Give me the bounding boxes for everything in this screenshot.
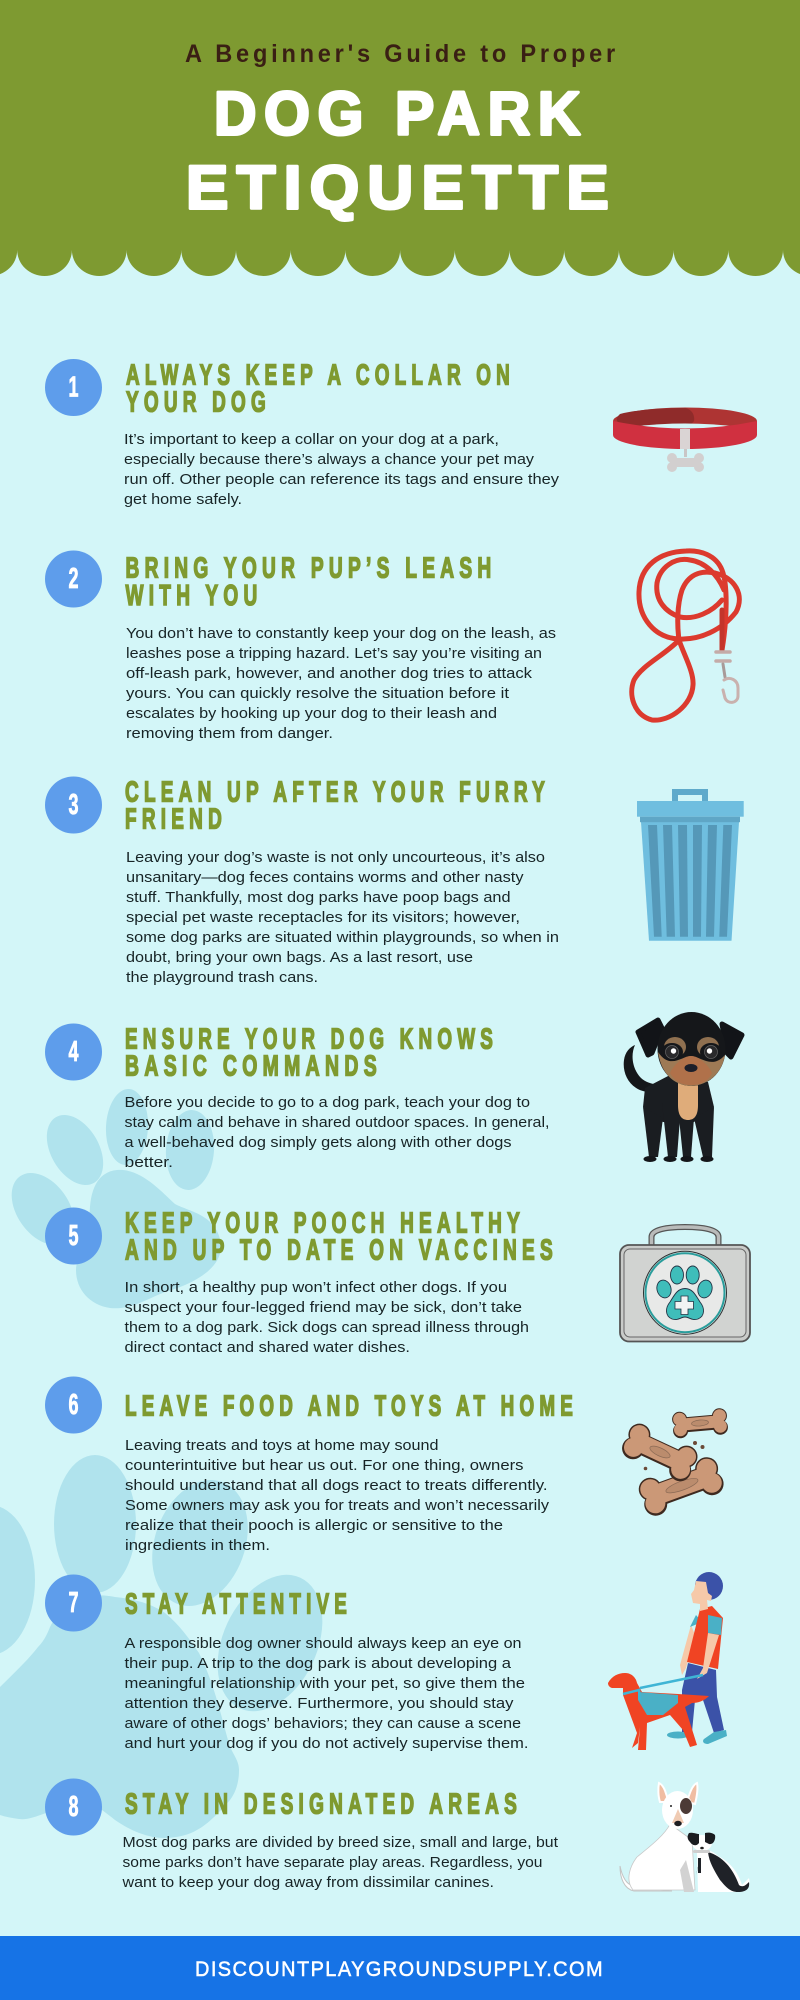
body text 4: stay calm and behave in shared outdoor spaces. In general, [124, 1114, 550, 1131]
body text 7: aware of other dogs’ behaviors; they can cause a scene [124, 1715, 521, 1732]
heading 2: BRING YOUR PUP’S LEASH [126, 552, 496, 584]
icon: dog biscuits [618, 1408, 729, 1519]
heading 4 [125, 1024, 498, 1082]
body text 2: You don’t have to constantly keep your dog on the leash, as [126, 625, 556, 642]
heading 2: WITH YOU [126, 580, 262, 612]
body text 4: better. [124, 1154, 173, 1171]
number badge 7 [45, 1574, 102, 1632]
heading 4: ENSURE YOUR DOG KNOWS [125, 1024, 498, 1056]
tip 2 [45, 550, 739, 742]
body text 5 [124, 1279, 529, 1356]
icon: person walking dog [608, 1572, 727, 1750]
number badge 1 [45, 359, 102, 416]
tip 6 [45, 1376, 729, 1554]
number badge 1: 1 [68, 372, 78, 404]
heading 1: ALWAYS KEEP A COLLAR ON [126, 360, 515, 392]
number badge 3 [45, 776, 102, 834]
number badge 2 [45, 550, 102, 608]
number badge 6 [45, 1376, 102, 1434]
body text 6: Leaving treats and toys at home may sound [125, 1437, 438, 1454]
heading 3: FRIEND [125, 804, 227, 836]
tip 1 [45, 359, 757, 508]
footer bar [0, 1936, 800, 2000]
heading 3: CLEAN UP AFTER YOUR FURRY [125, 776, 550, 808]
body text 7: meaningful relationship with your pet, so give them the [124, 1675, 525, 1692]
body text 1: especially because there’s always a chance your pet may [124, 451, 534, 468]
body text 7: their pup. A trip to the dog park is about developing a [124, 1655, 512, 1672]
body text 7: A responsible dog owner should always keep an eye on [124, 1635, 522, 1652]
heading 3 [125, 776, 550, 836]
website address: DISCOUNTPLAYGROUNDSUPPLY.COM [195, 1958, 604, 1981]
body text 4: Before you decide to go to a dog park, teach your dog to [124, 1094, 530, 1111]
body text 5: them to a dog park. Sick dogs can spread illness through [124, 1319, 529, 1336]
body text 6: realize that their pooch is allergic or sensitive to the [125, 1517, 503, 1534]
number badge 6: 6 [68, 1389, 78, 1421]
heading 5: AND UP TO DATE ON VACCINES [125, 1234, 558, 1266]
body text 6 [125, 1437, 549, 1554]
heading 1 [126, 360, 515, 418]
body text 1: It’s important to keep a collar on your dog at a park, [124, 431, 499, 448]
body text 7: attention they deserve. Furthermore, you should stay [124, 1695, 514, 1712]
title: ETIQUETTE [186, 154, 617, 222]
heading 1: YOUR DOG [126, 386, 271, 418]
number badge 4 [45, 1024, 102, 1080]
body text 2: removing them from danger. [126, 725, 333, 742]
title: DOG PARK [214, 80, 588, 148]
body text 2: off-leash park, however, and another dog tries to attack [126, 665, 532, 682]
body text 8: want to keep your dog away from dissimilar canines. [121, 1874, 494, 1891]
body text 1: run off. Other people can reference its tags and ensure they [124, 471, 559, 488]
body text 3: special pet waste receptacles for its visitors; however, [126, 909, 520, 926]
number badge 7: 7 [68, 1587, 78, 1619]
tip 4 [45, 1012, 742, 1171]
body text 2: yours. You can quickly resolve the situation before it [126, 685, 510, 702]
body text 5: direct contact and shared water dishes. [124, 1339, 410, 1356]
number badge 8: 8 [68, 1791, 78, 1823]
header banner [0, 0, 800, 276]
body text 3 [126, 849, 559, 986]
body text 6: should understand that all dogs react to treats differently. [125, 1477, 548, 1494]
heading 4: BASIC COMMANDS [125, 1050, 382, 1082]
body text 3: Leaving your dog’s waste is not only uncourteous, it’s also [126, 849, 545, 866]
heading 8: STAY IN DESIGNATED AREAS [125, 1788, 522, 1820]
body text 8 [121, 1834, 559, 1891]
body text 5: In short, a healthy pup won’t infect other dogs. If you [124, 1279, 507, 1296]
body text 5: suspect your four-legged friend may be sick, don’t take [124, 1299, 522, 1316]
body text 3: the playground trash cans. [126, 969, 318, 986]
tip 5 [45, 1208, 750, 1356]
icon: vet first aid kit [620, 1227, 750, 1342]
body text 2: escalates by hooking up your dog to their leash and [126, 705, 497, 722]
number badge 3: 3 [68, 789, 78, 821]
tip 3 [45, 776, 744, 986]
body text 2: leashes pose a tripping hazard. Let’s say you’re visiting an [126, 645, 542, 662]
body text 4 [124, 1094, 550, 1171]
body text 1 [124, 431, 559, 508]
number badge 8 [45, 1778, 102, 1836]
subtitle: A Beginner's Guide to Proper [185, 40, 619, 68]
tip 8 [45, 1778, 750, 1892]
body text 7: and hurt your dog if you do not actively supervise them. [124, 1735, 528, 1752]
body text 3: unsanitary—dog feces contains worms and other nasty [126, 869, 524, 886]
body text 3: some dog parks are situated within playgrounds, so when in [126, 929, 559, 946]
number badge 2: 2 [68, 563, 78, 595]
heading 2 [126, 552, 496, 612]
background paw prints [0, 1088, 343, 1838]
heading 5 [125, 1208, 558, 1266]
heading 5: KEEP YOUR POOCH HEALTHY [125, 1208, 525, 1240]
body text 7 [124, 1635, 528, 1752]
body text 2 [126, 625, 556, 742]
body text 6: ingredients in them. [125, 1537, 270, 1554]
icon: leash [632, 551, 739, 720]
number badge 4: 4 [68, 1036, 78, 1068]
body text 8: Most dog parks are divided by breed size, small and large, but [122, 1834, 559, 1851]
body text 4: a well-behaved dog simply gets along with other dogs [124, 1134, 512, 1151]
number badge 5: 5 [68, 1220, 78, 1252]
body text 3: doubt, bring your own bags. As a last resort, use [126, 949, 473, 966]
icon: trash can [637, 789, 744, 941]
body text 8: some parks don’t have separate play areas. Regardless, you [122, 1854, 542, 1871]
icon: collar [613, 408, 757, 472]
tip 7 [45, 1572, 727, 1752]
icon: black puppy [624, 1012, 742, 1162]
icon: two dogs [620, 1783, 750, 1892]
body text 1: get home safely. [124, 491, 242, 508]
number badge 5 [45, 1208, 102, 1264]
title [186, 80, 617, 222]
body text 3: stuff. Thankfully, most dog parks have poop bags and [126, 889, 510, 906]
heading 7: STAY ATTENTIVE [125, 1588, 352, 1620]
body text 6: counterintuitive but hear us out. For one thing, owners [125, 1457, 524, 1474]
body text 6: Some owners may ask you for treats and won’t necessarily [125, 1497, 549, 1514]
